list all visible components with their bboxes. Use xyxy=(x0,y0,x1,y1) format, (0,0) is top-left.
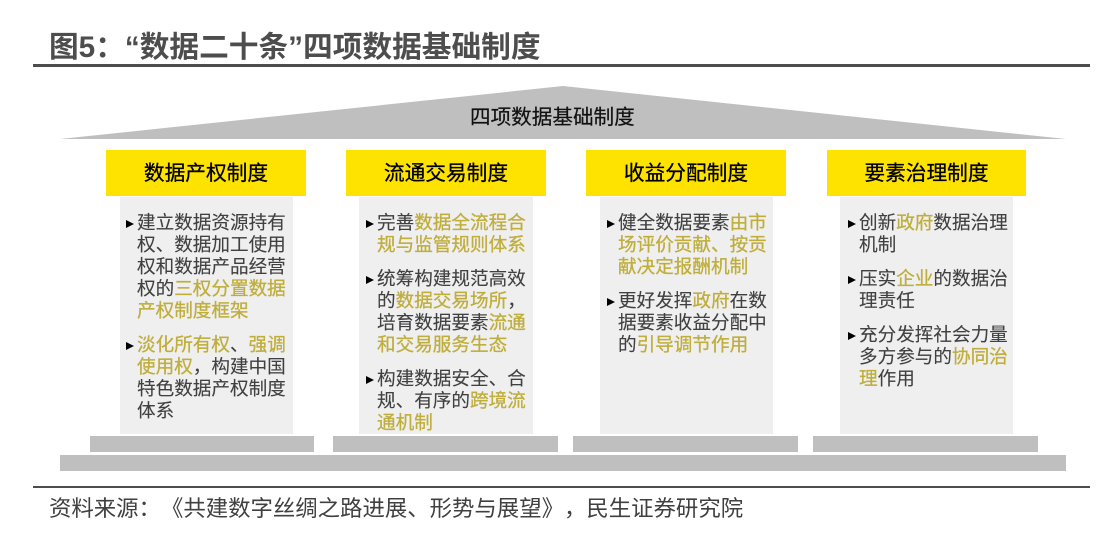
bullet text 2: 据要素收益分配中 xyxy=(618,312,767,333)
bullet text 2: 更好发挥政府在数 xyxy=(618,290,767,311)
bullet text 2: 体系 xyxy=(137,400,174,421)
bullet text 3: 多方参与的协同治 xyxy=(859,346,1008,367)
roof xyxy=(60,86,1066,139)
bullet text 3: 充分发挥社会力量 xyxy=(859,324,1008,345)
heading: governance: 要素治理制度 xyxy=(864,162,989,185)
bullet text 1 xyxy=(607,212,767,277)
bullet text 2: 压实企业的数据治 xyxy=(859,268,1008,289)
heading: property rights xyxy=(106,150,306,196)
bullet text 3 xyxy=(366,368,526,433)
title: 图5：“数据二十条”四项数据基础制度 xyxy=(49,31,541,64)
title rule xyxy=(33,64,1090,67)
base xyxy=(60,455,1066,471)
bullet text 1: 建立数据资源持有 xyxy=(137,212,286,233)
bullet text 1: 健全数据要素由市 xyxy=(618,212,767,233)
bullet text 2: 特色数据产权制度 xyxy=(137,378,286,399)
bullet text 2: 理责任 xyxy=(859,290,915,311)
bullet text 1: 权和数据产品经营 xyxy=(137,256,286,277)
bullet text 3: 构建数据安全、合 xyxy=(377,368,526,389)
panel: property rights xyxy=(120,197,293,434)
roof label: 四项数据基础制度 xyxy=(470,106,635,129)
bullet text 3: 规、有序的跨境流 xyxy=(377,390,526,411)
bullet text 2: 的数据交易场所， xyxy=(377,290,526,311)
bullet text 2: 的引导调节作用 xyxy=(618,334,748,355)
bullet text 3: 理作用 xyxy=(859,368,915,389)
plinth 2 xyxy=(333,436,558,452)
bullet text 1 xyxy=(366,212,526,255)
bullet text 1 xyxy=(848,212,1008,255)
panel: circulation and trading xyxy=(359,197,533,434)
plinth 3 xyxy=(573,436,798,452)
bullet text 1: 完善数据全流程合 xyxy=(377,212,526,233)
bullet text 1: 创新政府数据治理 xyxy=(859,212,1008,233)
bullet text 2: 和交易服务生态 xyxy=(377,334,507,355)
bullet text 2 xyxy=(848,268,1008,311)
bullet text 1: 献决定报酬机制 xyxy=(618,256,748,277)
bullet text 2 xyxy=(607,290,767,355)
heading: circulation and trading: 流通交易制度 xyxy=(384,162,508,185)
panel: governance xyxy=(840,197,1013,434)
bullet text 2: 培育数据要素流通 xyxy=(377,312,526,333)
bullet text 2: 统筹构建规范高效 xyxy=(377,268,526,289)
bullet text 1: 规与监管规则体系 xyxy=(377,234,526,255)
bullet text 1: 机制 xyxy=(859,234,896,255)
heading: governance xyxy=(827,150,1026,196)
source note: 资料来源：《共建数字丝绸之路进展、形势与展望》，民生证券研究院 xyxy=(49,496,743,521)
bullet text 1: 场评价贡献、按贡 xyxy=(618,234,767,255)
heading: income distribution xyxy=(586,150,786,196)
bullet text 1 xyxy=(126,212,286,321)
bullet text 3: 通机制 xyxy=(377,412,433,433)
bullet text 2: 使用权，构建中国 xyxy=(137,356,286,377)
bullet text 1: 权的三权分置数据 xyxy=(137,278,286,299)
heading: property rights: 数据产权制度 xyxy=(144,162,268,185)
bullet text 2 xyxy=(366,268,526,355)
bullet text 1: 产权制度框架 xyxy=(137,300,249,321)
bullet text 2: 淡化所有权、强调 xyxy=(137,334,286,355)
heading: circulation and trading xyxy=(346,150,546,196)
heading: income distribution: 收益分配制度 xyxy=(624,162,748,185)
footer rule xyxy=(33,486,1090,488)
plinth 1 xyxy=(90,436,314,452)
plinth 4 xyxy=(813,436,1038,452)
bullet text 2 xyxy=(126,334,286,421)
bullet text 3 xyxy=(848,324,1008,389)
panel: income distribution xyxy=(600,197,773,434)
bullet text 1: 权、数据加工使用 xyxy=(137,234,286,255)
